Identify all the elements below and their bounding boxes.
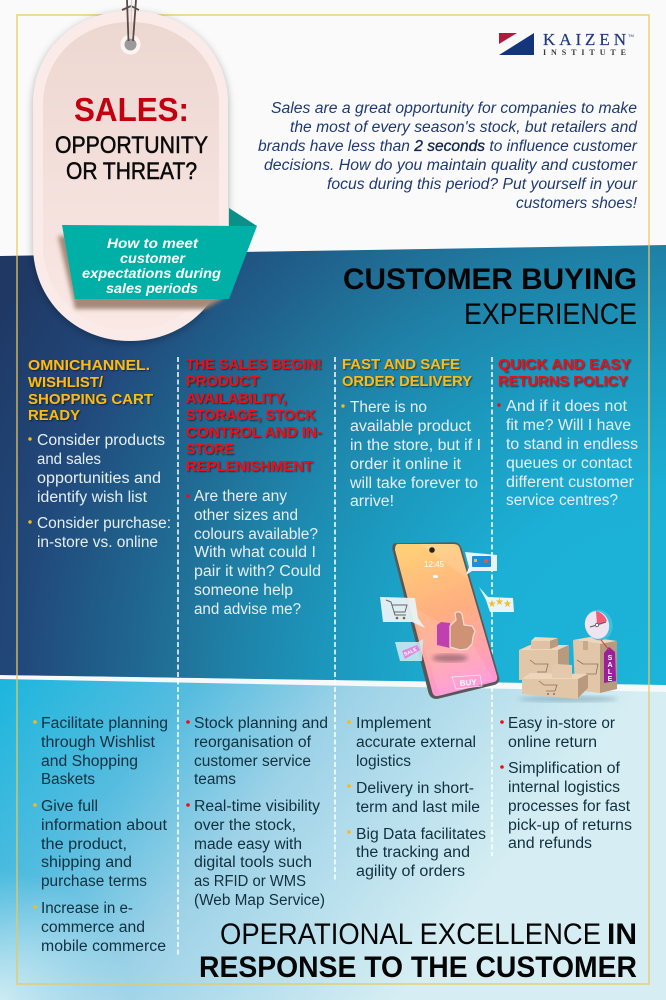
column 2 operational actions: Stock planning and: [194, 715, 328, 732]
icon: thumbs up: [437, 612, 475, 650]
column 1 customer questions: identify wish list: [37, 489, 148, 506]
bubble: star rating: ★: [495, 597, 504, 608]
column 4 operational actions: and refunds: [508, 835, 592, 852]
ribbon: [58, 208, 257, 309]
column 2 header: [186, 356, 322, 475]
column 2 header: STORAGE, STOCK: [186, 407, 316, 424]
column 2 header: AVAILABILITY,: [186, 390, 287, 407]
column 3 operational actions: accurate external: [356, 734, 476, 751]
title: OPPORTUNITY: [55, 132, 208, 159]
column 4 header: QUICK AND EASY: [498, 356, 631, 373]
price tag: [33, 0, 228, 341]
buy button: BUY: [459, 677, 478, 688]
column 1 operational actions: Facilitate planning: [41, 715, 168, 732]
column 1 operational actions: Give full: [41, 798, 98, 815]
column 2 operational actions: over the stock,: [194, 817, 296, 834]
column 2 operational actions: customer service: [194, 753, 311, 770]
column 1 operational actions: shipping and: [41, 854, 132, 871]
column 1 operational actions: purchase terms: [41, 873, 147, 890]
heading: customer buying experience: CUSTOMER BUYING: [343, 263, 637, 296]
column 3 header: FAST AND SAFE: [342, 356, 460, 373]
left big box: [519, 637, 569, 680]
bubble: shopping cart: [380, 597, 425, 628]
column 2 customer questions: someone help: [194, 582, 293, 599]
title: SALES:: [74, 91, 189, 128]
column 2 customer questions: Are there any: [194, 488, 287, 505]
column 1 customer questions: opportunities and: [37, 470, 161, 487]
heading: operational excellence: RESPONSE TO THE CUSTOMER: [199, 951, 637, 984]
column 4 operational actions: [500, 715, 632, 852]
column 2 operational actions: reorganisation of: [194, 734, 312, 751]
icon: clock: [582, 607, 616, 643]
sale tag: A: [607, 662, 613, 669]
heading: operational excellence: IN: [607, 918, 637, 951]
column 3 customer questions: in the store, but if I: [350, 437, 481, 454]
logo: Kaizen Institute: [499, 30, 634, 57]
column 3 customer questions: order it online it: [350, 456, 462, 473]
column 1 operational actions: [33, 715, 168, 955]
column 2 header: STORE: [186, 441, 234, 458]
column 1 customer questions: in-store vs. online: [37, 534, 158, 551]
logo: Kaizen Institute: TM: [628, 33, 634, 38]
column 3 operational actions: term and last mile: [356, 799, 480, 816]
column 4 customer questions: fit me? Will I have: [506, 417, 631, 434]
sale tag: E: [608, 676, 613, 683]
column 1 operational actions: mobile commerce: [41, 938, 166, 955]
column 1 customer questions: Consider purchase:: [37, 515, 171, 532]
intro text: focus during this period? Put yourself in your: [327, 176, 638, 193]
column 3 operational actions: the tracking and: [356, 844, 470, 861]
column 3 customer questions: There is no: [350, 399, 427, 416]
sale tag: [601, 640, 616, 683]
heading: customer buying experience: EXPERIENCE: [464, 298, 637, 331]
column 4 operational actions: pick-up of returns: [508, 817, 632, 834]
column 1 operational actions: commerce and: [41, 919, 145, 936]
column 1 header: OMNICHANNEL.: [28, 357, 150, 374]
background: dark customer experience panel: [0, 245, 666, 685]
column 4 operational actions: online return: [508, 734, 597, 751]
title: [55, 91, 208, 185]
background: lower light panel: [0, 670, 666, 1000]
bubble: star rating: ★: [488, 599, 497, 610]
column 1 header: WISHLIST/: [28, 374, 104, 391]
column 4 customer questions: [497, 398, 638, 509]
column 4 customer questions: And if it does not: [506, 398, 628, 415]
bubble: sale tag: SALE: [403, 646, 419, 658]
column 3 customer questions: arrive!: [350, 493, 394, 510]
intro text: the most of every season's stock, but retailers and: [290, 119, 638, 136]
phone clock: 12:45: [424, 560, 445, 569]
column 1 operational actions: and Shopping: [41, 753, 138, 770]
background: white band: [0, 675, 666, 692]
heading: operational excellence: OPERATIONAL EXCELLENCE: [220, 918, 601, 951]
illustration: parcels: [518, 607, 618, 702]
bubble: payment card: [465, 552, 497, 575]
column 3 customer questions: [341, 399, 481, 510]
heading: operational excellence: [199, 918, 637, 984]
column 1 operational actions: information about: [41, 817, 168, 834]
column 2 customer questions: [186, 488, 321, 618]
ribbon: expectations during: [82, 266, 222, 281]
column 1 header: READY: [28, 407, 80, 424]
column 2 header: CONTROL AND IN-: [186, 424, 322, 441]
title: OR THREAT?: [66, 158, 197, 185]
column 1 operational actions: Increase in e-: [41, 900, 133, 917]
column 1 header: [28, 357, 153, 424]
intro text: decisions. How do you maintain quality and customer: [264, 157, 638, 174]
column 2 operational actions: Real-time visibility: [194, 798, 320, 815]
heading: customer buying experience: [343, 263, 637, 331]
right tall box: [573, 637, 617, 693]
intro text: Sales are a great opportunity for companies to make: [271, 100, 637, 117]
column 3 header: [342, 356, 472, 390]
logo: Kaizen Institute: INSTITUTE: [543, 48, 626, 57]
bubble: star rating: [479, 587, 514, 612]
column 2 customer questions: colours available?: [194, 526, 318, 543]
intro text: customers shoes!: [516, 195, 638, 212]
column 2 header: THE SALES BEGIN!: [186, 356, 322, 373]
column 2 operational actions: as RFID or WMS: [194, 873, 306, 890]
column 3 operational actions: [347, 715, 486, 880]
column 4 operational actions: Simplification of: [508, 760, 621, 777]
column 2 header: REPLENISHMENT: [186, 458, 313, 475]
column 1 header: SHOPPING CART: [28, 391, 153, 408]
column 2 customer questions: With what could I: [194, 544, 316, 561]
column 4 operational actions: Easy in-store or: [508, 715, 615, 732]
column 1 operational actions: the product,: [41, 836, 127, 853]
sale tag: S: [608, 655, 613, 662]
intro text: brands have less than 2 seconds to influence customer: [258, 138, 638, 155]
column 2 operational actions: made easy with: [194, 836, 302, 853]
column 2 customer questions: pair it with? Could: [194, 563, 321, 580]
column 4 customer questions: queues or contact: [506, 455, 633, 472]
column 1 customer questions: Consider products: [37, 432, 165, 449]
ribbon: How to meet: [107, 236, 199, 251]
column 2 operational actions: (Web Map Service): [194, 892, 325, 909]
column 4 header: RETURNS POLICY: [498, 373, 628, 390]
column 1 customer questions: [28, 432, 171, 551]
column 3 operational actions: logistics: [356, 753, 411, 770]
bubble: star rating: ★: [503, 599, 512, 610]
column 2 header: PRODUCT: [186, 373, 259, 390]
column 1 operational actions: through Wishlist: [41, 734, 156, 751]
ribbon: customer: [120, 251, 186, 266]
column 2 operational actions: teams: [194, 771, 236, 788]
sale tag: L: [608, 669, 613, 676]
column 3 customer questions: will take forever to: [349, 475, 478, 492]
column 4 operational actions: processes for fast: [508, 798, 631, 815]
column 4 header: [498, 356, 631, 390]
column dividers: [178, 357, 492, 955]
column 3 operational actions: Implement: [356, 715, 432, 732]
column 1 customer questions: and sales: [37, 451, 101, 468]
front box: [522, 664, 588, 699]
column 4 customer questions: different customer: [506, 474, 634, 491]
column 4 operational actions: internal logistics: [508, 779, 620, 796]
column 4 customer questions: to stand in endless: [506, 436, 638, 453]
illustration: smartphone: [393, 543, 499, 698]
column 3 operational actions: agility of orders: [356, 863, 465, 880]
column 4 customer questions: service centres?: [506, 492, 618, 509]
column 2 customer questions: other sizes and: [194, 507, 298, 524]
bubble: sale tag: [395, 639, 423, 661]
column 3 operational actions: Delivery in short-: [356, 780, 474, 797]
intro text: [258, 100, 638, 212]
buy button: [452, 675, 482, 689]
column 3 customer questions: available product: [350, 418, 472, 435]
logo: Kaizen Institute: KAIZEN: [543, 30, 626, 49]
column 2 operational actions: [186, 715, 328, 909]
column 3 header: ORDER DELIVERY: [342, 373, 472, 390]
column 3 operational actions: Big Data facilitates: [356, 826, 486, 843]
background: top white area: [0, 0, 666, 300]
ribbon: sales periods: [106, 281, 199, 296]
column 1 operational actions: Baskets: [41, 771, 95, 788]
background: pale bottom-left corner: [0, 870, 130, 1000]
column 2 customer questions: and advise me?: [194, 601, 301, 618]
column 2 operational actions: digital tools such: [194, 854, 312, 871]
